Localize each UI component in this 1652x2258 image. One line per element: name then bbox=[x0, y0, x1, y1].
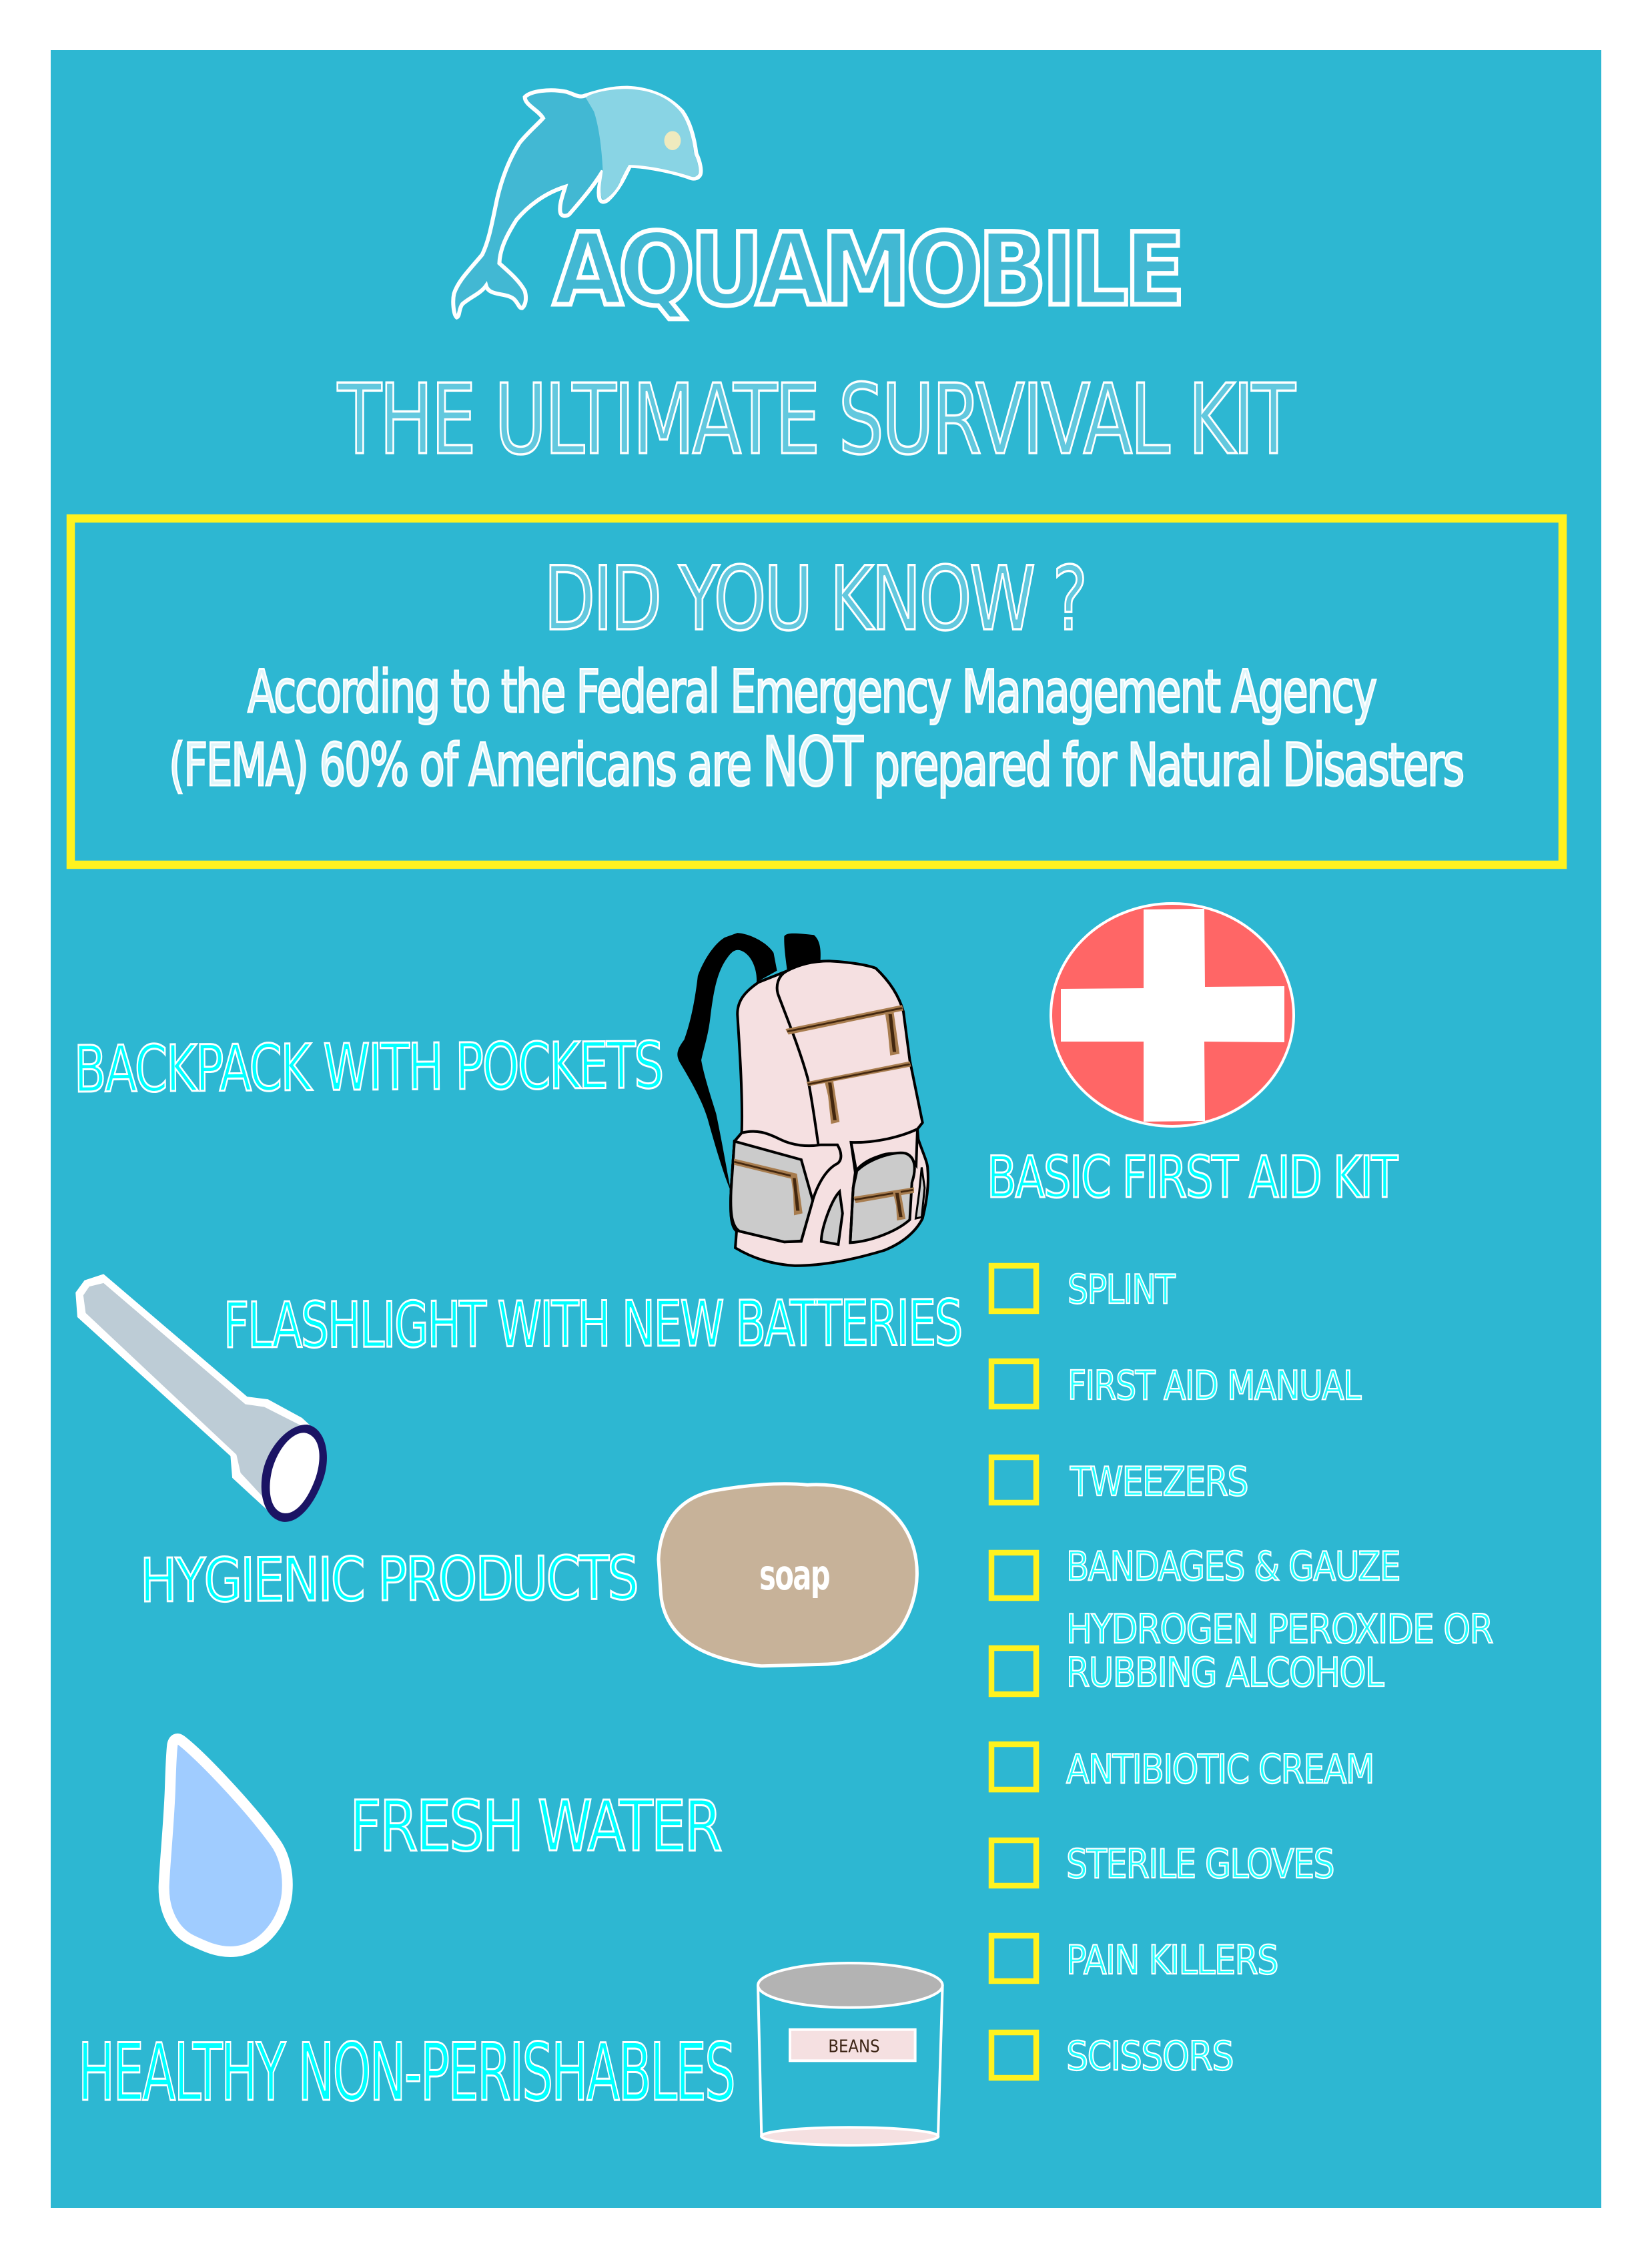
zipper: lower pockets bbox=[734, 1158, 914, 1220]
checklist: first aid items bbox=[991, 1266, 1493, 2080]
heading: basic first aid kit: BASIC FIRST AID KIT bbox=[987, 1144, 1398, 1211]
text: soap: soap bbox=[759, 1551, 829, 1599]
item: first aid manual bbox=[991, 1361, 1362, 1409]
icon: backpack bbox=[677, 933, 928, 1266]
item: hydrogen peroxide or rubbing alcohol bbox=[991, 1606, 1493, 1696]
item: tweezers bbox=[991, 1457, 1248, 1505]
title: THE ULTIMATE SURVIVAL KIT bbox=[337, 364, 1296, 476]
item: sterile gloves: STERILE GLOVES bbox=[1066, 1841, 1334, 1888]
zipper: upper pocket bbox=[785, 1005, 903, 1056]
item: bandages and gauze bbox=[991, 1543, 1400, 1598]
panel: did you know bbox=[71, 518, 1563, 865]
label: flashlight: FLASHLIGHT WITH NEW BATTERIES bbox=[224, 1287, 961, 1363]
item: splint bbox=[991, 1266, 1176, 1313]
label: backpack: BACKPACK WITH POCKETS bbox=[73, 1028, 663, 1107]
item: hydrogen peroxide or rubbing alcohol: RUBBING ALCOHOL bbox=[1066, 1649, 1384, 1696]
item: pain killers: PAIN KILLERS bbox=[1066, 1937, 1278, 1984]
icon: dolphin logo bbox=[453, 88, 701, 318]
item: bandages and gauze: BANDAGES & GAUZE bbox=[1066, 1543, 1400, 1590]
icon: first aid cross bbox=[1051, 903, 1294, 1126]
item: first aid manual: FIRST AID MANUAL bbox=[1068, 1363, 1362, 1409]
item: scissors: SCISSORS bbox=[1066, 2033, 1233, 2080]
label: healthy non-perishables: HEALTHY NON-PERISHABLES bbox=[78, 2027, 734, 2119]
item: tweezers: TWEEZERS bbox=[1070, 1459, 1248, 1505]
item: antibiotic cream bbox=[991, 1744, 1374, 1793]
icon: dolphin eye bbox=[665, 131, 681, 150]
text: beans: BEANS bbox=[828, 2036, 880, 2056]
logo wordmark: AQUAMOBILE bbox=[553, 212, 1181, 328]
item: sterile gloves bbox=[991, 1840, 1334, 1888]
label: fresh water: FRESH WATER bbox=[350, 1786, 721, 1867]
icon: flashlight bbox=[75, 1274, 327, 1522]
zipper: middle pocket bbox=[807, 1062, 911, 1124]
item: antibiotic cream: ANTIBIOTIC CREAM bbox=[1066, 1746, 1374, 1793]
item: pain killers bbox=[991, 1936, 1278, 1984]
item: scissors bbox=[991, 2032, 1233, 2080]
item: hydrogen peroxide or rubbing alcohol: HYDROGEN PEROXIDE OR bbox=[1066, 1606, 1493, 1653]
icon: water drop bbox=[164, 1739, 288, 1952]
icon: bean can bbox=[758, 1963, 943, 2145]
label: hygienic products: HYGIENIC PRODUCTS bbox=[140, 1543, 637, 1616]
item: splint: SPLINT bbox=[1068, 1266, 1176, 1313]
icon: soap bbox=[659, 1484, 917, 1666]
heading: did you know: DID YOU KNOW ? bbox=[544, 548, 1086, 651]
